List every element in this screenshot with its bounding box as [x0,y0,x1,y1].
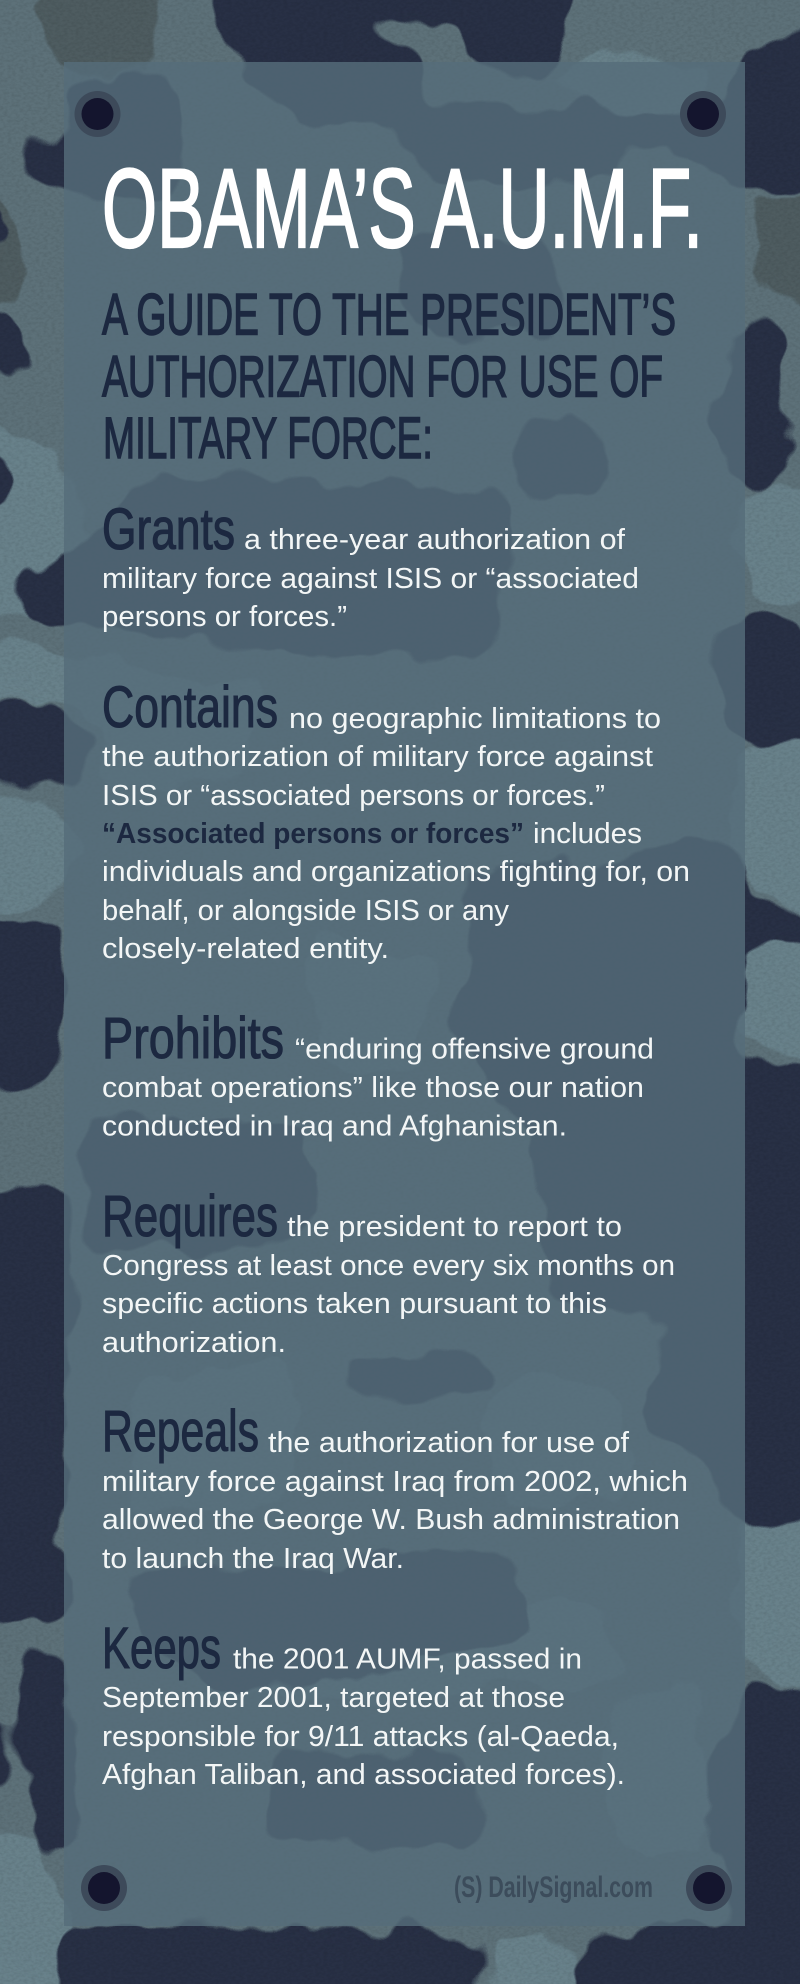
section: Contains: closely-related entity. [102,933,389,965]
section: Contains: behalf, or alongside ISIS or any [102,895,510,927]
section: Grants: persons or forces.” [102,601,347,633]
grommet: bottom left [81,1865,127,1911]
section: Keeps: September 2001, targeted at those [102,1682,565,1714]
logo credit: (S) DailySignal.com [454,1871,653,1904]
section: Requires: the president to report to [287,1211,622,1243]
section: Grants: military force against ISIS or “associated [102,563,639,595]
grommet: top left [74,91,120,137]
section: Keeps: the 2001 AUMF, passed in [233,1644,582,1676]
section: Contains: no geographic limitations to [289,703,661,735]
section: Contains: includes [533,818,642,850]
section: Grants: Grants [102,497,235,562]
section: Requires: specific actions taken pursuant to this [102,1288,607,1320]
section: Contains: Contains [102,675,278,740]
section: Contains: individuals and organizations fighting for, on [102,856,690,888]
section: Keeps [102,1616,625,1791]
section: Contains [102,675,690,965]
grommet: bottom right [686,1865,732,1911]
section: Grants: a three-year authorization of [244,524,626,556]
section: Repeals: Repeals [102,1399,259,1464]
section: Contains: the authorization of military force against [102,741,653,773]
section: Prohibits: Prohibits [102,1006,284,1071]
section: Grants [102,497,639,633]
section: Prohibits [102,1006,654,1142]
grommet: top right [680,91,726,137]
section: Prohibits: combat operations” like those our nation [102,1072,644,1104]
translucent main panel [64,62,745,1926]
section: Repeals: to launch the Iraq War. [102,1543,404,1575]
section: Requires: Congress at least once every six months on [102,1250,675,1282]
section: Prohibits: “enduring offensive ground [295,1034,654,1066]
section: Repeals [102,1399,688,1575]
section: Repeals: the authorization for use of [268,1427,630,1459]
section: Requires: authorization. [102,1327,286,1359]
subtitle [102,282,676,471]
section: Keeps: Afghan Taliban, and associated forces). [102,1759,625,1791]
section: Prohibits: conducted in Iraq and Afghanistan. [102,1110,567,1142]
section: Repeals: military force against Iraq from 2002, which [102,1466,688,1498]
section: Requires: Requires [102,1184,278,1249]
section: Repeals: allowed the George W. Bush administration [102,1504,680,1536]
section: Requires [102,1184,675,1359]
subtitle: MILITARY FORCE: [103,406,433,471]
section: Keeps: Keeps [102,1616,221,1681]
section: Contains: ISIS or “associated persons or forces.” [102,780,605,812]
section: Contains: “Associated persons or forces” [102,818,524,850]
section: Keeps: responsible for 9/11 attacks (al-Qaeda, [102,1721,619,1753]
